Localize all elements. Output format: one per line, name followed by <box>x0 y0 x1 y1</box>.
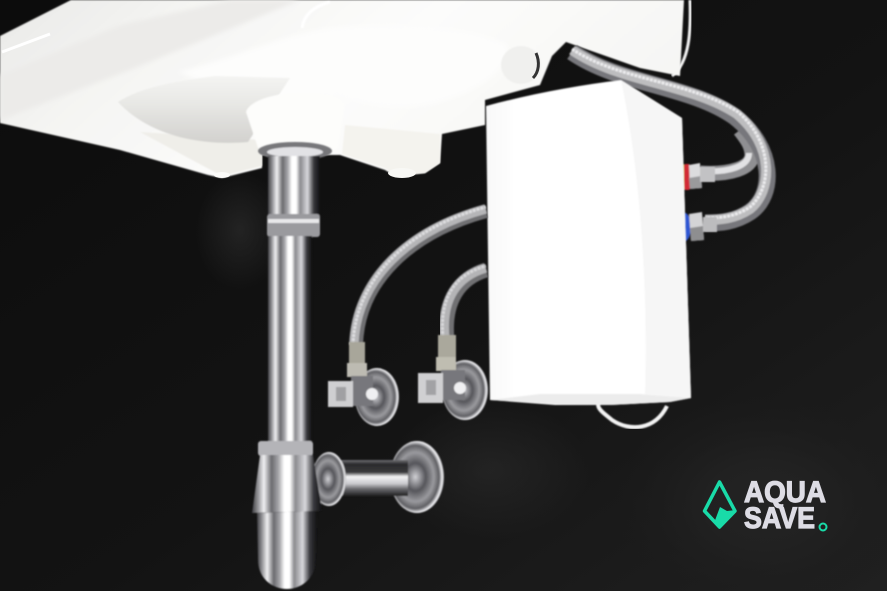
long tube <box>268 236 312 443</box>
logo drop icon <box>704 482 736 529</box>
lower rim lip <box>140 132 262 176</box>
white power cable below heater <box>598 394 667 427</box>
left angle valve <box>328 342 399 426</box>
trap bottom cap <box>257 511 317 589</box>
right mounting lip <box>342 125 440 176</box>
blue cold water connector <box>673 209 717 245</box>
shaded diagonal band on rim <box>0 0 300 120</box>
basin bowl lower, shaded <box>118 76 290 143</box>
chrome drain pipe and bottle trap <box>252 142 444 589</box>
white power cable behind sink <box>672 0 690 76</box>
right braided hose to valve <box>442 266 486 340</box>
trap body cone <box>252 455 322 513</box>
left braided hose to valve <box>353 207 486 345</box>
underside feet <box>388 168 416 178</box>
slip joint ring <box>267 214 320 237</box>
red hot water connector <box>672 161 715 193</box>
logo wordmark <box>744 476 826 535</box>
trap connector <box>312 452 346 506</box>
horizontal trap arm <box>340 460 408 496</box>
logo wordmark: SAVE <box>744 502 815 535</box>
logo wordmark: AQUA <box>744 476 826 509</box>
right angle valve <box>418 335 488 420</box>
Aqua Save logo <box>704 476 826 535</box>
ceramic sink underside <box>0 0 684 178</box>
mounting bolt <box>501 46 541 84</box>
lower ring <box>258 441 313 456</box>
water heater box <box>486 80 691 405</box>
rim highlight <box>2 34 50 52</box>
drain cone <box>246 92 345 157</box>
wall flange <box>390 441 444 513</box>
large braided hose from sink to heater outlet <box>572 49 767 223</box>
top collar <box>258 142 332 160</box>
basin bowl upper <box>178 25 508 107</box>
glossy arc on rim <box>302 2 330 28</box>
upper tube <box>268 156 320 216</box>
logo dot <box>820 524 826 530</box>
